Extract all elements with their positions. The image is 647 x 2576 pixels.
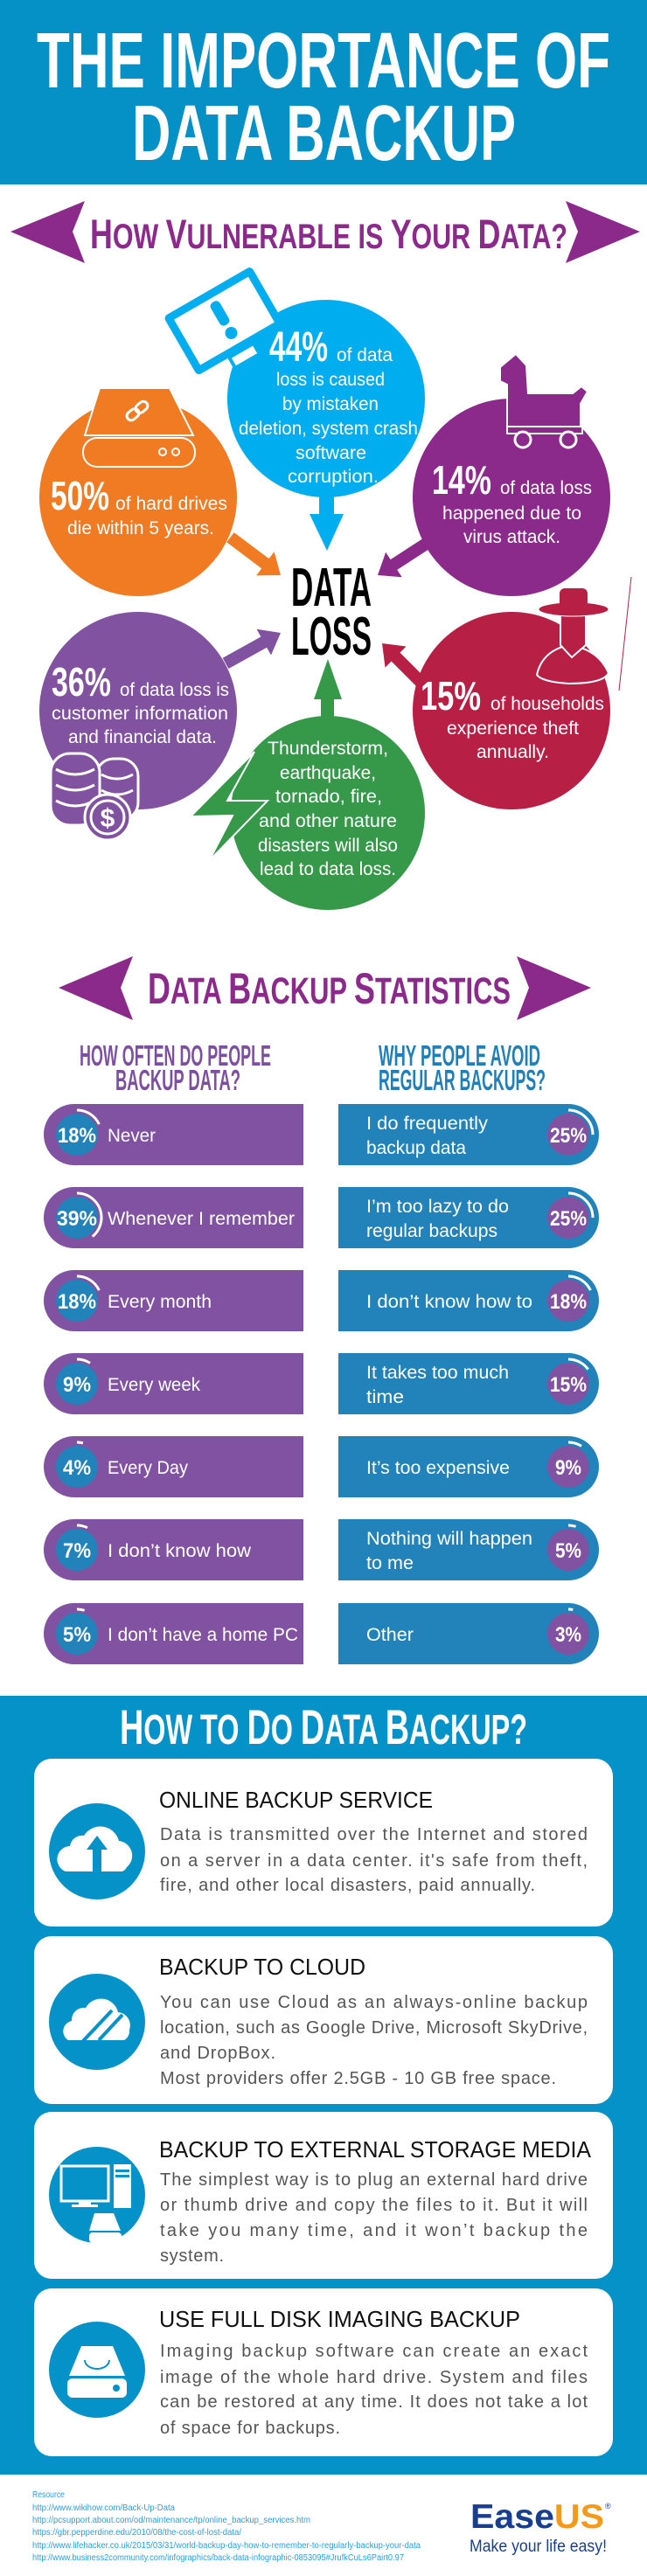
icon: cloud sync — [49, 1974, 145, 2070]
chart: why avoid bars: 25% — [550, 1124, 587, 1148]
card: full disk imaging backup: of space for backups. — [160, 2419, 340, 2438]
panel: 36% customer information: and financial data. — [68, 727, 217, 747]
panel: 44% mistaken deletion: of data — [337, 345, 393, 365]
card: backup to external storage media — [34, 2112, 613, 2279]
panel: 44% mistaken deletion: software — [296, 443, 366, 463]
panel: natural disasters: tornado, fire, — [275, 787, 382, 807]
icon: trojan horse — [500, 354, 588, 448]
panel: how to do data backup section — [0, 1696, 647, 2475]
card: full disk imaging backup: image of the whole hard drive. System and files — [160, 2368, 588, 2387]
DATA LOSS center text — [291, 558, 372, 667]
chart: why avoid bars — [338, 1104, 599, 1664]
chart: how often bars: 18% — [58, 1124, 96, 1148]
header banner — [0, 0, 647, 184]
card: backup to external storage media: system. — [160, 2246, 224, 2266]
panel: natural disasters: Thunderstorm, — [268, 739, 388, 759]
panel: 15% households theft: annually. — [477, 742, 549, 762]
chart: how often bars: Every week — [108, 1375, 200, 1395]
panel: 36% customer information: customer information — [52, 704, 228, 724]
section heading: Data Backup Statistics: DATA BACKUP STATISTICS — [148, 964, 511, 1013]
panel: natural disasters: lead to data loss. — [260, 859, 396, 879]
card: backup to cloud — [34, 1936, 613, 2104]
icon: cloud upload — [49, 1803, 145, 1899]
chart: why avoid bars: It takes too much — [366, 1363, 509, 1383]
card: backup to cloud: and DropBox. — [160, 2044, 275, 2063]
card: backup to external storage media: take you many time, and it won’t backup the — [160, 2221, 588, 2240]
chart: why avoid bars: time — [366, 1387, 404, 1407]
card: backup to external storage media: The simplest way is to plug an external hard drive — [160, 2170, 588, 2190]
panel: natural disasters — [231, 716, 425, 910]
panel: natural disasters: and other nature — [259, 811, 397, 831]
chart: why avoid bars: I’m too lazy to do — [366, 1197, 509, 1217]
arrow: orange to DATA LOSS — [221, 525, 289, 587]
card: backup to external storage media: BACKUP TO EXTERNAL STORAGE MEDIA — [159, 2136, 592, 2163]
chart: how often bars: Every Day — [108, 1458, 188, 1478]
chart: why avoid bars: I do frequently — [366, 1114, 489, 1134]
chart: why avoid bars: Nothing will happen — [366, 1529, 532, 1549]
panel: 36% customer information: of data loss is — [120, 680, 229, 700]
icon: lightning bolt — [191, 752, 268, 861]
panel: 44% mistaken deletion: 44% — [269, 324, 328, 371]
footer: resources: https://gbr.pepperdine.edu/2010/08/the-cost-of-lost-data/ — [32, 2528, 241, 2538]
card: online backup service: on a server in a data center. it's safe from theft, — [160, 1851, 588, 1871]
card: backup to external storage media: or thumb drive and copy the files to it. But it will — [160, 2196, 588, 2215]
footer: resources: Resource — [32, 2490, 65, 2500]
panel: 44% mistaken deletion: loss is caused — [276, 370, 385, 390]
footer: resources: http://www.wikihow.com/Back-Up-Data — [32, 2503, 175, 2513]
chart: how often bars: 9% — [63, 1373, 91, 1397]
panel: 36% customer information — [39, 612, 237, 809]
panel: 44% mistaken deletion: corruption. — [288, 467, 379, 487]
logo: EaseUS: Make your life easy! — [470, 2538, 607, 2556]
panel: 15% households theft: experience theft — [447, 719, 579, 739]
footer: resources: http://www.lifehacker.co.uk/2015/03/31/world-backup-day-how-to-remember-to-regularly-backup-your-data — [32, 2541, 421, 2551]
panel: natural disasters: earthquake, — [280, 763, 376, 783]
chart: how often bars — [44, 1104, 303, 1664]
chart: why avoid bars: backup data — [366, 1138, 466, 1158]
panel: 15% households theft — [413, 612, 610, 809]
arrow: blue down to DATA LOSS — [310, 491, 344, 551]
card: backup to cloud: Most providers offer 2.5GB - 10 GB free space. — [160, 2069, 556, 2088]
panel: 50% hard drives: 50% — [51, 473, 109, 518]
chart: why avoid bars: 18% — [550, 1290, 587, 1314]
chart: how often bars: 39% — [57, 1207, 97, 1231]
icon: hard drive — [83, 388, 195, 467]
chart: why avoid bars: I don’t know how to — [366, 1292, 532, 1312]
column heading: how often: BACKUP DATA? — [115, 1064, 240, 1096]
panel: 15% households theft: 15% — [421, 673, 481, 719]
arrow: purple from 36% to DATA LOSS — [219, 620, 288, 677]
icon: hard drive — [49, 2322, 145, 2418]
title — [37, 17, 610, 177]
panel: 14% virus attack: virus attack. — [463, 527, 560, 547]
DATA LOSS center text: LOSS — [291, 607, 372, 667]
panel: 36% customer information: 36% — [52, 659, 111, 705]
chart: why avoid bars: It’s too expensive — [366, 1458, 510, 1478]
card: backup to cloud: You can use Cloud as an always-online backup — [160, 1993, 588, 2012]
chart: why avoid bars: to me — [366, 1553, 414, 1573]
panel: 50% hard drives: die within 5 years. — [67, 518, 214, 538]
arrow: red from 15% to DATA LOSS — [372, 633, 434, 695]
chart: why avoid bars: 5% — [555, 1539, 581, 1563]
footer: resources: http://pcsupport.about.com/od/maintenance/tp/online_backup_services.htm — [32, 2516, 310, 2525]
panel: 14% virus attack: of data loss — [500, 478, 592, 498]
icon: computer and drive — [49, 2147, 145, 2243]
chart: why avoid bars: 9% — [555, 1456, 581, 1480]
icon: thief with hat — [537, 577, 631, 691]
panel: natural disasters: disasters will also — [258, 836, 398, 856]
logo: EaseUS: ® — [605, 2502, 611, 2510]
icon: coins with dollar — [51, 753, 138, 840]
card: full disk imaging backup: USE FULL DISK IMAGING BACKUP — [159, 2306, 520, 2332]
panel: 50% hard drives — [39, 399, 237, 596]
card: online backup service: Data is transmitted over the Internet and stored — [160, 1825, 588, 1844]
card: full disk imaging backup — [34, 2288, 613, 2456]
column heading: why avoid — [379, 1039, 546, 1096]
panel: 44% mistaken deletion: deletion, system crash — [239, 419, 418, 439]
chart: how often bars: Whenever I remember — [108, 1209, 295, 1229]
chart: why avoid bars: 25% — [550, 1207, 587, 1231]
panel: 44% mistaken deletion: by mistaken — [282, 394, 379, 414]
footer: resources — [32, 2490, 421, 2563]
icon: coins with dollar: $ — [101, 804, 115, 833]
card: online backup service — [34, 1759, 613, 1927]
chart: why avoid bars: regular backups — [366, 1221, 497, 1241]
chart: how often bars: 18% — [58, 1290, 96, 1314]
card: full disk imaging backup: Imaging backup software can create an exact — [160, 2342, 588, 2361]
icon: monitor with exclamation — [163, 266, 291, 386]
chart: how often bars: 4% — [63, 1456, 91, 1480]
arrow: green up to DATA LOSS — [314, 659, 342, 719]
card: backup to cloud: location, such as Google Drive, Microsoft SkyDrive, — [160, 2018, 588, 2038]
card: backup to cloud: BACKUP TO CLOUD — [159, 1954, 365, 1980]
panel: 14% virus attack: happened due to — [442, 503, 581, 524]
chart: why avoid bars: Other — [366, 1625, 414, 1645]
column heading: how often — [80, 1039, 271, 1096]
chart: how often bars: I don’t have a home PC — [108, 1625, 298, 1645]
heading: How to Do Data Backup?: HOW TO DO DATA BACKUP? — [120, 1699, 527, 1754]
section heading: Data Backup Statistics — [59, 956, 591, 1020]
chart: how often bars: 7% — [63, 1539, 91, 1563]
panel: 14% virus attack — [413, 399, 610, 596]
section heading: How Vulnerable is Your Data?: HOW VULNERABLE IS YOUR DATA? — [90, 211, 567, 257]
chart: how often bars: 5% — [63, 1623, 91, 1647]
column heading: how often: HOW OFTEN DO PEOPLE — [80, 1039, 271, 1072]
card: online backup service: ONLINE BACKUP SERVICE — [159, 1787, 433, 1813]
chart: why avoid bars: 15% — [550, 1373, 587, 1397]
panel: 14% virus attack: 14% — [432, 457, 491, 503]
card: full disk imaging backup: can be restored at any time. It does not take a lot — [160, 2392, 588, 2412]
panel: 44% mistaken deletion — [227, 300, 425, 497]
logo: EaseUS — [470, 2498, 611, 2556]
arrow: purple from 14% to DATA LOSS — [370, 531, 435, 587]
logo: EaseUS: EaseUS — [470, 2498, 604, 2536]
panel: 15% households theft: of households — [490, 694, 604, 714]
chart: how often bars: Never — [108, 1126, 156, 1146]
panel: 50% hard drives: of hard drives — [115, 494, 227, 514]
section heading: How Vulnerable is Your Data? — [10, 201, 640, 263]
chart: how often bars: I don’t know how — [108, 1541, 252, 1561]
card: online backup service: fire, and other local disasters, paid annually. — [160, 1876, 535, 1895]
footer: resources: http://www.business2community.com/infographics/back-data-infographic-0853095#JrufkCuLs6Pairt0.97 — [32, 2553, 404, 2563]
chart: how often bars: Every month — [108, 1292, 212, 1312]
DATA LOSS center text: DATA — [291, 558, 372, 618]
chart: why avoid bars: 3% — [555, 1623, 581, 1647]
